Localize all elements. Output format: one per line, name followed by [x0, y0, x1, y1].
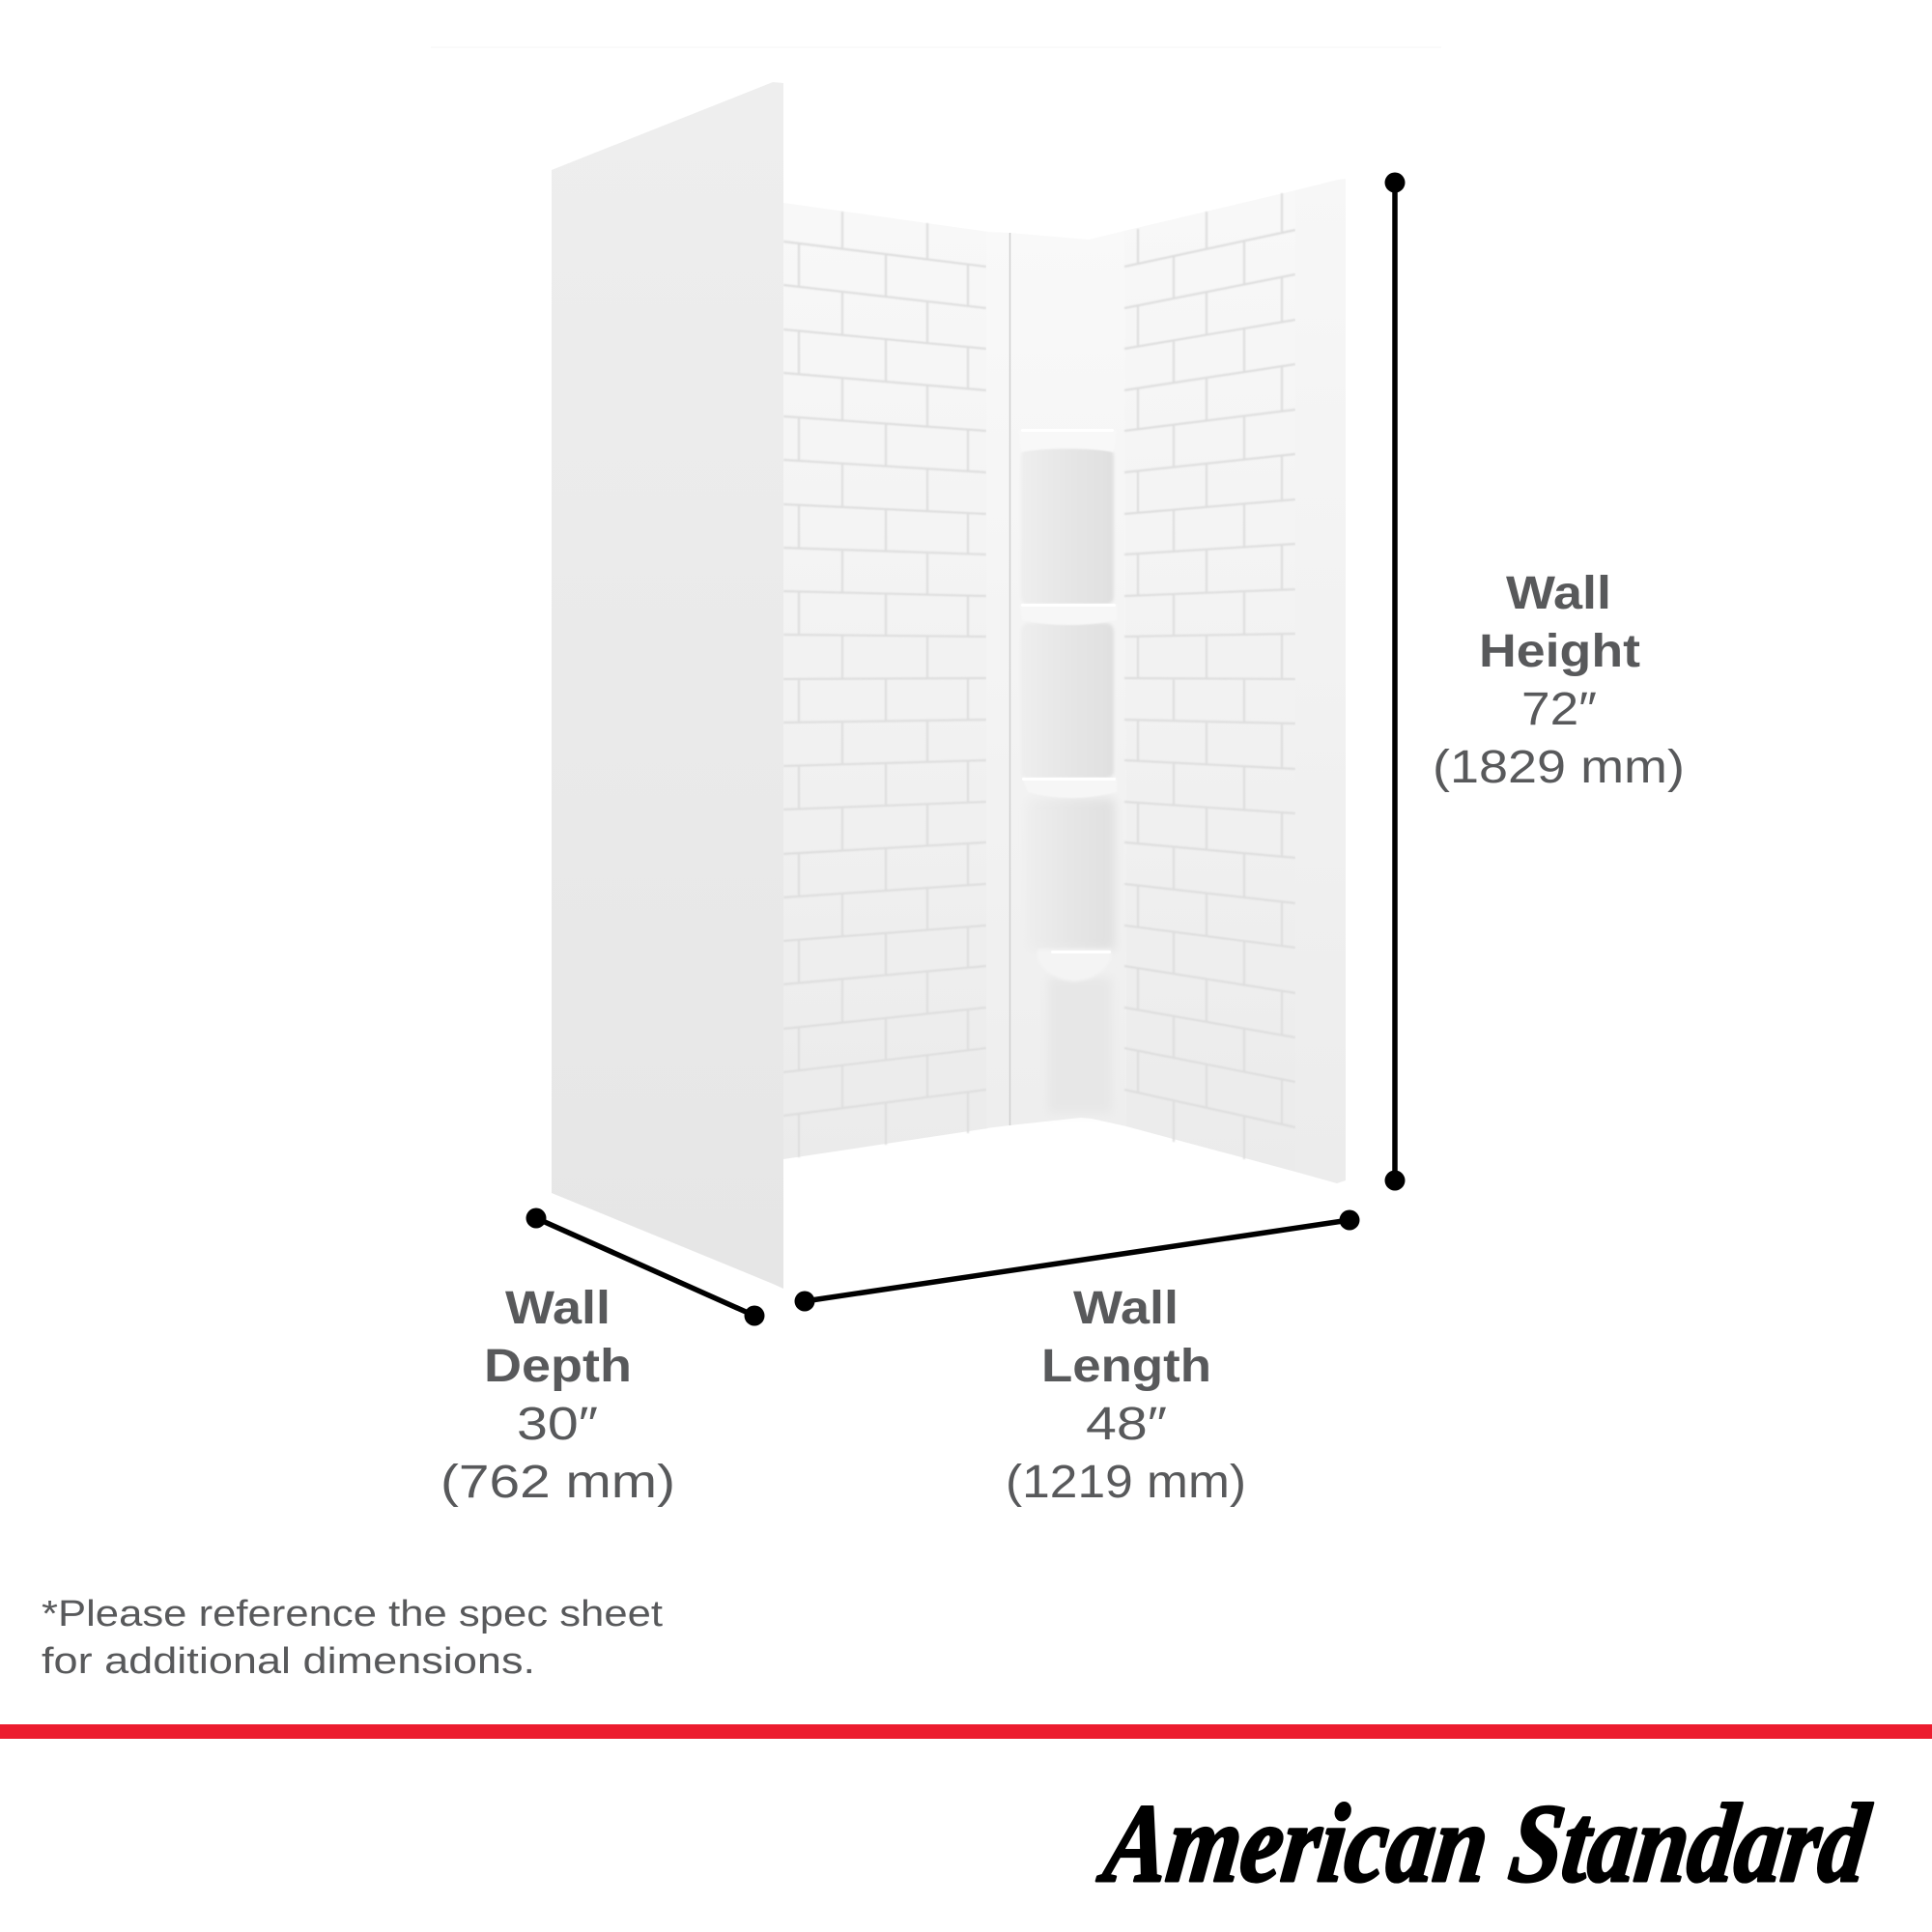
recess shading	[1021, 448, 1115, 1113]
label: wall length: Wall	[1073, 1283, 1179, 1334]
label: wall depth: 30″	[517, 1399, 598, 1450]
shelf 2	[1020, 604, 1117, 625]
label: wall height: (1829 mm)	[1433, 742, 1685, 793]
right end flange	[1295, 179, 1346, 1183]
dimension line: wall depth	[526, 1208, 765, 1325]
footnote	[42, 1594, 664, 1682]
shelf 3	[1022, 778, 1117, 798]
label: wall length: 48″	[1086, 1399, 1167, 1450]
label: wall height: Height	[1479, 626, 1640, 677]
red divider bar	[0, 1724, 1932, 1739]
dimension line: wall height	[1385, 172, 1405, 1190]
back wall with subway tile	[783, 203, 988, 1159]
shower wall illustration	[552, 82, 1346, 1289]
label: wall length	[1006, 1283, 1246, 1508]
label: wall depth: Wall	[505, 1283, 611, 1334]
right wall with subway tile	[1124, 190, 1295, 1172]
footnote: *Please reference the spec sheet	[42, 1594, 664, 1634]
label: wall length: (1219 mm)	[1006, 1457, 1246, 1508]
label: wall length: Length	[1041, 1341, 1211, 1392]
left side panel	[552, 82, 783, 1289]
corner panel with shelves	[986, 231, 1126, 1128]
label: wall height: Wall	[1506, 568, 1611, 619]
label: wall height: 72″	[1521, 684, 1597, 735]
shelf 1	[1019, 429, 1116, 452]
label: wall depth	[440, 1283, 675, 1508]
dimension line: wall length	[794, 1209, 1360, 1312]
shelf 4	[1037, 950, 1111, 981]
label: wall height	[1433, 568, 1685, 793]
faint top line	[431, 46, 1441, 48]
footnote: for additional dimensions.	[42, 1641, 535, 1682]
label: wall depth: Depth	[484, 1341, 632, 1392]
label: wall depth: (762 mm)	[440, 1457, 675, 1508]
